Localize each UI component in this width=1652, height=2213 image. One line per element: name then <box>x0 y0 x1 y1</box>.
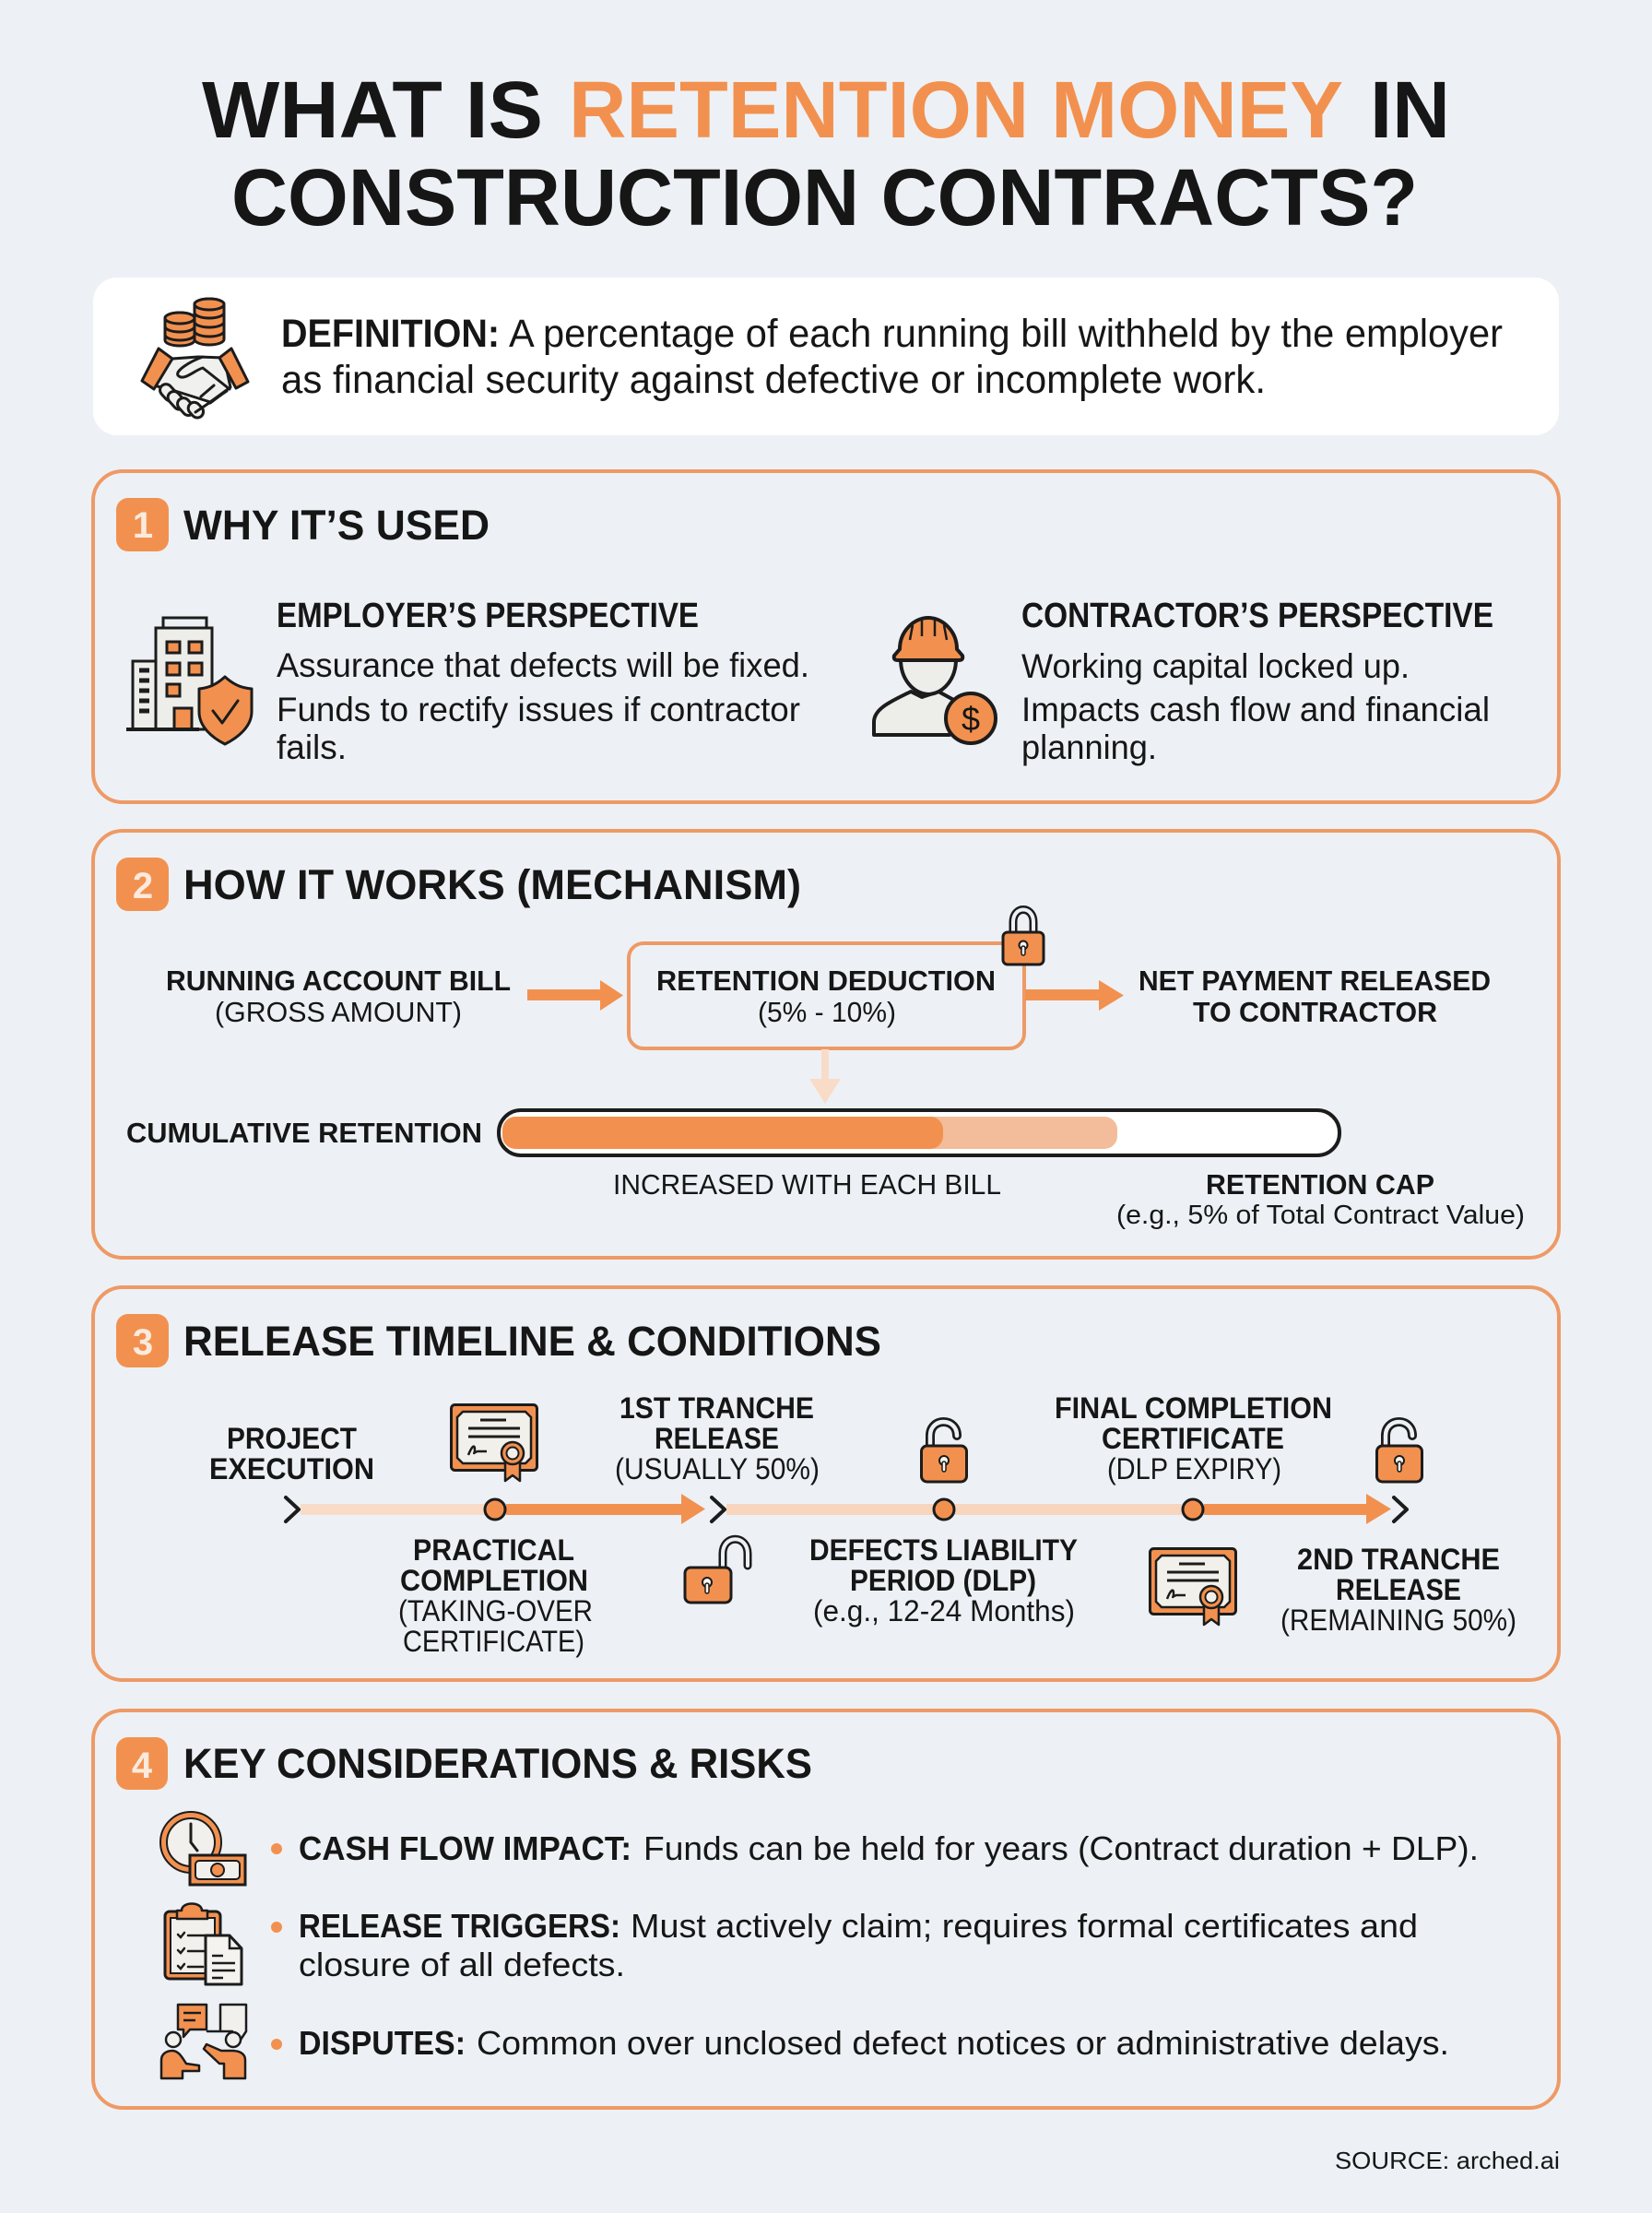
defects liability period label <box>809 1533 1078 1627</box>
title <box>202 65 1450 243</box>
release triggers text: Must actively claim; requires formal certificates and <box>631 1907 1418 1945</box>
release triggers text: closure of all defects. <box>299 1946 625 1983</box>
arrow: bill to deduction <box>527 980 623 1011</box>
practical completion label: PRACTICAL <box>413 1533 574 1567</box>
disputes text: DISPUTES: <box>299 2024 466 2062</box>
contractor's perspective: planning. <box>1021 728 1157 766</box>
final completion label: FINAL COMPLETION <box>1055 1391 1332 1425</box>
disputes text: Common over unclosed defect notices or administrative delays. <box>477 2024 1449 2062</box>
retention deduction box: (5% - 10%) <box>758 996 896 1028</box>
project execution label: PROJECT <box>227 1422 357 1455</box>
cash flow impact text: CASH FLOW IMPACT: <box>299 1829 631 1867</box>
icon: worker with dollar coin: $ <box>962 700 980 738</box>
bullet: cash flow <box>271 1843 282 1854</box>
final completion label <box>1055 1391 1332 1485</box>
practical completion label: CERTIFICATE) <box>403 1625 584 1658</box>
definition text <box>281 312 1503 402</box>
icon: open lock 2 <box>922 1422 966 1482</box>
panel: definition <box>93 278 1559 435</box>
retention cap label <box>1116 1168 1525 1230</box>
release triggers text <box>299 1907 1418 1983</box>
project execution label: EXECUTION <box>209 1452 374 1485</box>
title: WHAT IS <box>202 65 543 155</box>
2nd tranche label: 2ND TRANCHE <box>1297 1543 1500 1576</box>
release triggers text: RELEASE TRIGGERS: <box>299 1907 620 1945</box>
defects liability period label: DEFECTS LIABILITY <box>809 1533 1078 1567</box>
1st tranche label <box>615 1391 820 1485</box>
icon: clock and money <box>160 1812 245 1885</box>
net payment label: TO CONTRACTOR <box>1193 996 1437 1028</box>
cumulative retention label: CUMULATIVE RETENTION <box>126 1117 482 1149</box>
employer's perspective: fails. <box>277 728 347 766</box>
badge 2 <box>116 858 169 911</box>
icon: coins and handshake <box>142 299 248 420</box>
bullet: release triggers <box>271 1922 282 1933</box>
retention deduction box: RETENTION DEDUCTION <box>656 964 996 997</box>
employer's perspective <box>277 597 809 766</box>
cumulative retention bar <box>499 1110 1339 1155</box>
contractor's perspective: CONTRACTOR’S PERSPECTIVE <box>1021 597 1493 635</box>
bar caption: INCREASED WITH EACH BILL <box>613 1168 1001 1201</box>
net payment label: NET PAYMENT RELEASED <box>1139 964 1491 997</box>
contractor's perspective: Working capital locked up. <box>1021 647 1410 685</box>
contractor's perspective <box>1021 597 1493 766</box>
employer's perspective: Funds to rectify issues if contractor <box>277 691 800 728</box>
employer's perspective: EMPLOYER’S PERSPECTIVE <box>277 597 699 635</box>
cash flow impact text <box>299 1829 1479 1867</box>
panel 4: key considerations <box>93 1710 1559 2108</box>
2nd tranche label: RELEASE <box>1336 1573 1461 1606</box>
definition text: A percentage of each running bill withheld by the employer <box>509 312 1503 356</box>
icon: clipboard and document <box>165 1903 242 1984</box>
definition text: as financial security against defective or incomplete work. <box>281 358 1266 402</box>
defects liability period label: (e.g., 12-24 Months) <box>813 1594 1075 1627</box>
1st tranche label: 1ST TRANCHE <box>620 1391 814 1425</box>
badge 4 <box>116 1737 168 1790</box>
practical completion label: COMPLETION <box>400 1564 588 1597</box>
badge 3 <box>116 1314 169 1367</box>
retention cap label: (e.g., 5% of Total Contract Value) <box>1116 1201 1525 1230</box>
badge 1 <box>116 498 169 551</box>
badge 2: 2 <box>133 866 153 906</box>
employer's perspective: Assurance that defects will be fixed. <box>277 646 809 684</box>
badge 1: 1 <box>133 505 153 546</box>
icon: closed lock <box>1003 909 1044 964</box>
panel 1: why it's used <box>93 471 1559 802</box>
retention deduction box <box>629 943 1024 1048</box>
running account bill label: RUNNING ACCOUNT BILL <box>166 964 511 997</box>
project execution label <box>209 1422 374 1485</box>
title: RETENTION MONEY <box>569 65 1343 155</box>
2nd tranche label <box>1280 1543 1516 1637</box>
arrow: down to cumulative bar <box>809 1049 841 1104</box>
arrow: deduction to net payment <box>1025 980 1124 1011</box>
contractor's perspective: Impacts cash flow and financial <box>1021 691 1490 728</box>
icon: open lock 3 <box>1377 1422 1422 1482</box>
icon: certificate 1 <box>452 1405 537 1481</box>
net payment label <box>1139 964 1491 1028</box>
icon: certificate 2 <box>1150 1549 1235 1625</box>
definition text: DEFINITION: <box>281 312 500 356</box>
icon: open lock 1 <box>685 1539 748 1603</box>
badge 3: 3 <box>133 1322 153 1363</box>
badge 4: 4 <box>132 1746 153 1786</box>
final completion label: (DLP EXPIRY) <box>1107 1452 1281 1485</box>
defects liability period label: PERIOD (DLP) <box>850 1564 1036 1597</box>
heading: key considerations: KEY CONSIDERATIONS & RISKS <box>183 1740 812 1787</box>
title: IN <box>1370 65 1450 155</box>
1st tranche label: RELEASE <box>655 1422 779 1455</box>
icon: disputing people <box>161 2005 246 2078</box>
2nd tranche label: (REMAINING 50%) <box>1280 1604 1516 1637</box>
heading: why it's used: WHY IT’S USED <box>183 502 490 549</box>
practical completion label: (TAKING-OVER <box>398 1594 593 1627</box>
cash flow impact text: Funds can be held for years (Contract duration + DLP). <box>643 1829 1479 1867</box>
practical completion label <box>398 1533 593 1658</box>
final completion label: CERTIFICATE <box>1102 1422 1284 1455</box>
running account bill label: (GROSS AMOUNT) <box>215 996 462 1028</box>
icon: building with shield <box>126 618 252 744</box>
running account bill label <box>166 964 511 1028</box>
icon: worker with dollar coin <box>874 618 996 743</box>
bullet: disputes <box>271 2039 282 2050</box>
timeline <box>286 1494 1407 1524</box>
heading: how it works: HOW IT WORKS (MECHANISM) <box>183 861 801 908</box>
heading: release timeline: RELEASE TIMELINE & CONDITIONS <box>183 1318 881 1365</box>
title: CONSTRUCTION CONTRACTS? <box>231 153 1418 243</box>
retention cap label: RETENTION CAP <box>1206 1168 1434 1201</box>
panel 2: how it works <box>93 831 1559 1258</box>
1st tranche label: (USUALLY 50%) <box>615 1452 820 1485</box>
source: SOURCE: arched.ai <box>1335 2147 1560 2174</box>
panel 3: release timeline <box>93 1287 1559 1680</box>
